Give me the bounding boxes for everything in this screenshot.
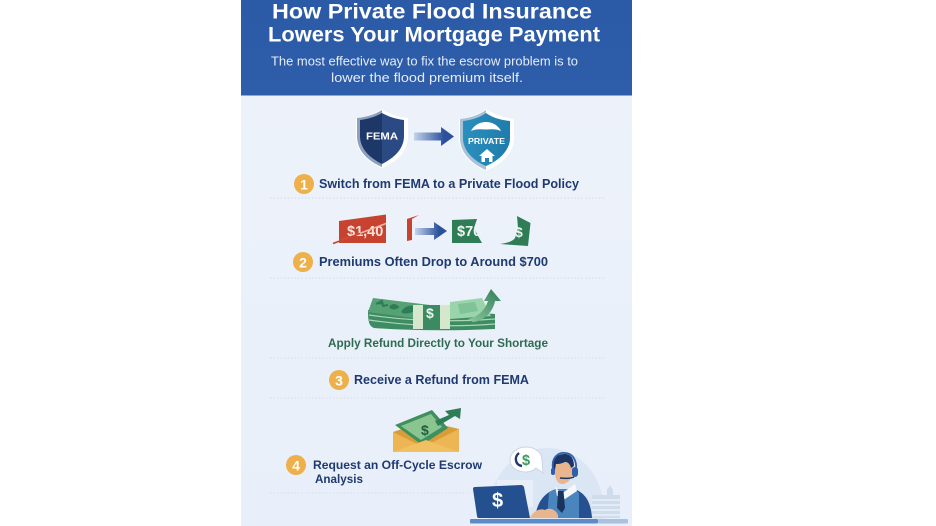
- arrow: FEMA to private: [414, 127, 454, 146]
- icon: new premium green tag: $70: [457, 224, 481, 240]
- step 2: 2: [299, 254, 307, 270]
- subtitle: [271, 54, 578, 85]
- step 2: Premiums Often Drop to Around $700: [319, 255, 548, 269]
- subtitle: lower the flood premium itself.: [331, 71, 523, 85]
- hands: [530, 509, 558, 518]
- icon: new premium green tag: $: [515, 224, 523, 240]
- step 1: 1: [300, 176, 308, 192]
- step 3: 3: [335, 372, 343, 388]
- desk: [470, 519, 628, 524]
- illustration: support agent at laptop: $: [492, 490, 503, 512]
- title: [268, 0, 600, 46]
- house: [479, 149, 495, 162]
- step 1: Switch from FEMA to a Private Flood Policy: [319, 177, 579, 191]
- step 2: [293, 252, 548, 272]
- icon: new premium green tag: [452, 216, 530, 246]
- step 4: Request an Off-Cycle Escrow: [313, 458, 483, 472]
- icon: private shield: [459, 109, 514, 171]
- icon: private shield: PRIVATE: [468, 137, 506, 146]
- building: [592, 485, 620, 518]
- headset: [553, 453, 576, 469]
- speech bubble: [510, 447, 543, 473]
- icon: envelope with cash: [393, 408, 461, 452]
- title: How Private Flood Insurance: [272, 0, 592, 24]
- step 3: Receive a Refund from FEMA: [354, 373, 529, 387]
- icon: FEMA shield: FEMA: [366, 132, 398, 142]
- step 4: 4: [292, 458, 300, 474]
- step 4: [286, 455, 483, 486]
- umbrella: [471, 122, 501, 131]
- icon: cash stack with arrow: [368, 289, 501, 330]
- illustration: support agent at laptop: [470, 447, 628, 524]
- subtitle: The most effective way to fix the escrow problem is to: [271, 54, 578, 68]
- panel: background: [241, 95, 632, 526]
- speech bubble: $: [522, 453, 530, 469]
- panel: header: [241, 0, 632, 96]
- icon: old premium red tag: [333, 214, 419, 244]
- icon: envelope with cash: $: [421, 422, 429, 438]
- torso: [535, 489, 592, 518]
- icon: cash stack with arrow: $: [426, 305, 434, 321]
- arrow: premium drop: [415, 222, 447, 240]
- icon: old premium red tag: $1,40: [347, 224, 383, 240]
- laptop: [473, 485, 530, 518]
- head: [555, 462, 573, 484]
- refund caption: Apply Refund Directly to Your Shortage: [328, 336, 548, 350]
- title: Lowers Your Mortgage Payment: [268, 22, 600, 46]
- step 3: [329, 370, 529, 390]
- step 4: Analysis: [315, 472, 363, 486]
- icon: FEMA shield: [356, 109, 408, 168]
- infographic canvas: [241, 0, 632, 526]
- step 1: [294, 174, 579, 194]
